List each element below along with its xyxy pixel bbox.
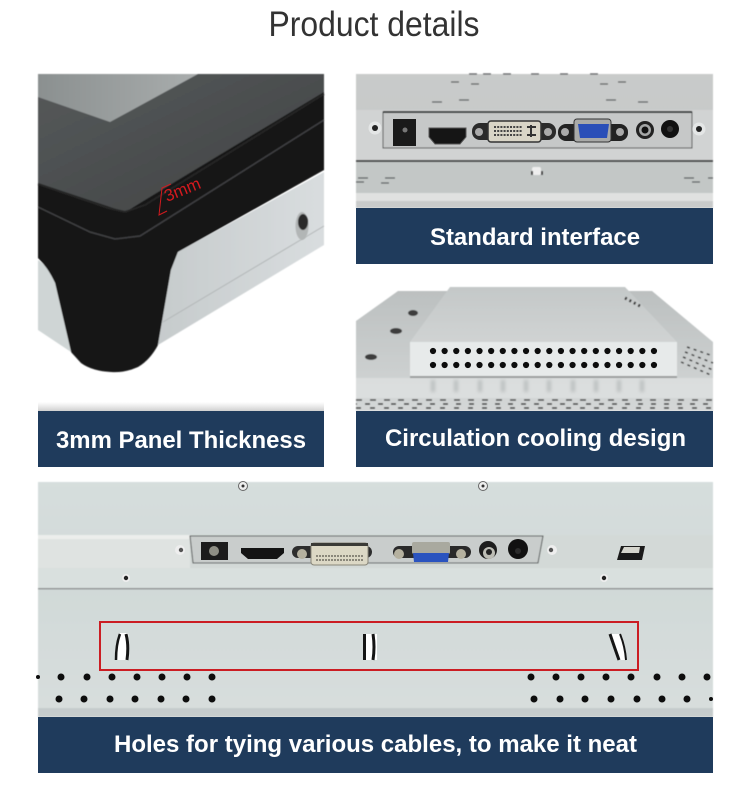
photo: monitor corner — [38, 74, 324, 372]
icon: screws — [368, 122, 706, 136]
photo: rear housing — [356, 287, 713, 411]
icon: USB port — [617, 546, 645, 560]
red highlight box — [100, 622, 638, 670]
icon: HDMI port — [241, 548, 284, 559]
caption text: 3mm Panel Thickness — [56, 427, 306, 454]
icon: screw hole — [296, 212, 308, 240]
icon: DC jack — [393, 119, 416, 146]
caption bar — [356, 208, 713, 264]
icon: DVI port — [472, 121, 556, 142]
panel: 3mm panel thickness — [38, 74, 324, 467]
panel: circulation cooling — [356, 287, 713, 467]
icon: audio jacks — [479, 539, 528, 559]
icon: audio jacks — [636, 120, 679, 139]
icon: left slot — [116, 633, 129, 660]
caption text: Standard interface — [430, 224, 640, 251]
icon: DC jack — [201, 542, 228, 560]
panel: standard interface — [356, 74, 713, 264]
panel: cable holes — [36, 482, 713, 773]
icon: VGA port — [393, 542, 471, 562]
icon: screws — [122, 482, 608, 582]
icon: middle slot — [364, 634, 377, 660]
ventilation holes — [36, 674, 713, 702]
photo: interface plate — [356, 74, 713, 208]
callout: 3mm dimension: 3mm — [161, 174, 204, 206]
caption bar — [38, 717, 713, 773]
photo: rear panel — [38, 482, 713, 717]
caption bar — [356, 411, 713, 467]
caption bar — [38, 411, 324, 467]
icon: right slot — [609, 634, 626, 660]
vent holes — [433, 351, 656, 365]
icon: DVI port — [292, 543, 372, 565]
title: Product details — [268, 5, 480, 44]
icon: VGA port — [558, 119, 628, 142]
caption text: Circulation cooling design — [385, 425, 686, 452]
cable slots — [116, 633, 626, 660]
icon: HDMI port — [429, 128, 466, 144]
caption shadow — [38, 402, 324, 411]
caption text: Holes for tying various cables, to make it neat — [114, 731, 637, 758]
